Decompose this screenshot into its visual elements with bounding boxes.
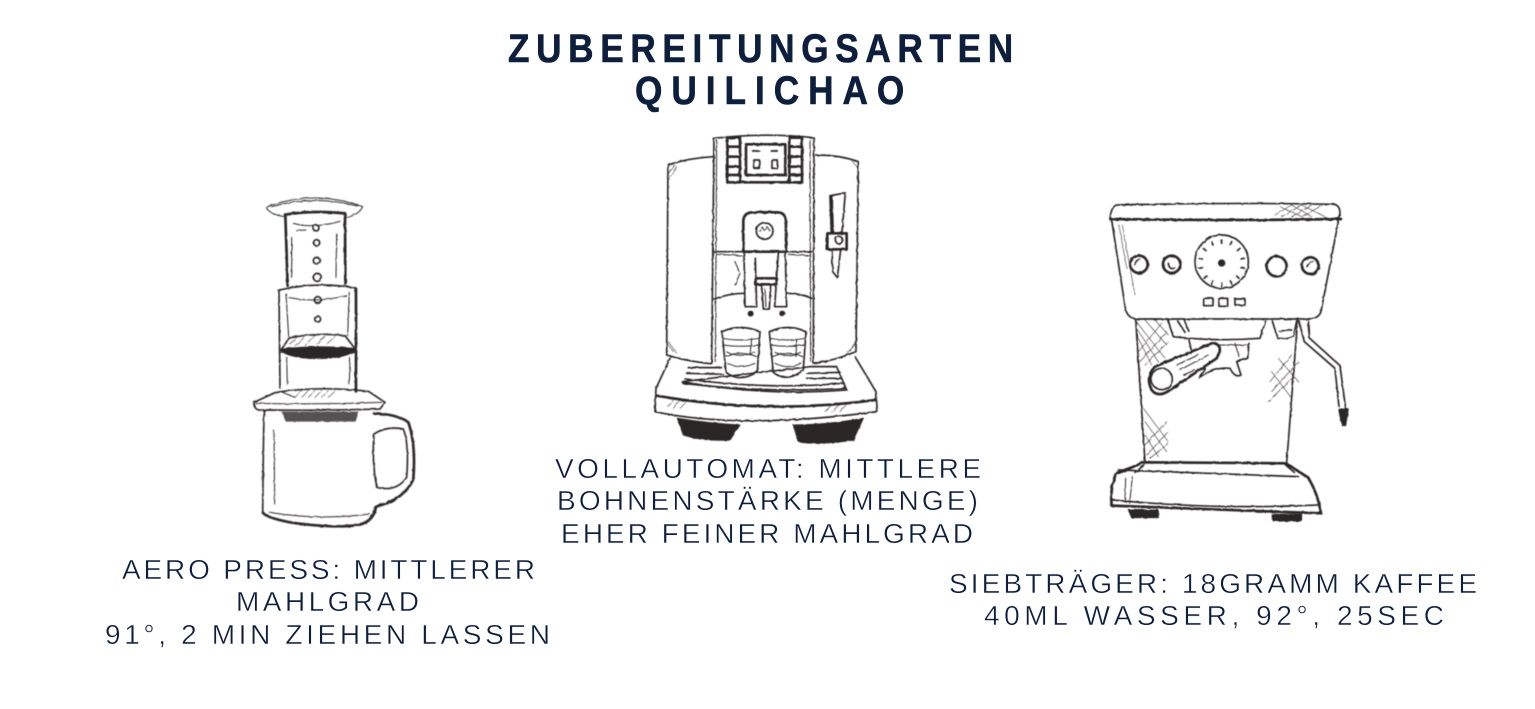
- dial: [1195, 235, 1248, 288]
- icon: fully automatic coffee machine: [655, 135, 877, 443]
- steam wand: [827, 193, 847, 278]
- text block: aero press: [105, 554, 550, 650]
- text block: vollautomat: VOLLAUTOMAT: MITTLERE: [555, 453, 981, 484]
- knobs: [1130, 256, 1319, 276]
- title: QUILICHAO: [635, 68, 904, 112]
- text block: aero press: AERO PRESS: MITTLERER: [122, 554, 535, 585]
- icon: aero press on mug: [254, 198, 414, 526]
- machine feet: [677, 418, 863, 443]
- display panel: [727, 138, 802, 182]
- text block: siebträger: 40ML WASSER, 92°, 25SEC: [984, 600, 1444, 631]
- icon: portafilter espresso machine: [1110, 203, 1348, 521]
- title: ZUBEREITUNGSARTEN: [508, 26, 1013, 70]
- coffee spout: [743, 212, 787, 316]
- text block: vollautomat: EHER FEINER MAHLGRAD: [561, 518, 973, 549]
- text block: siebträger: SIEBTRÄGER: 18GRAMM KAFFEE: [949, 568, 1477, 599]
- base: [1111, 462, 1321, 521]
- text block: aero press: MAHLGRAD: [236, 586, 419, 617]
- text block: vollautomat: [555, 453, 981, 549]
- group head: [1168, 320, 1266, 340]
- portafilter handle: [1149, 343, 1220, 394]
- steam pipe: [1299, 321, 1348, 426]
- text block: vollautomat: BOHNENSTÄRKE (MENGE): [557, 485, 978, 516]
- drip tray: [655, 357, 877, 421]
- buttons: [1204, 298, 1245, 306]
- title: [508, 26, 1013, 112]
- text block: siebträger: [949, 568, 1477, 631]
- cups: [722, 327, 806, 378]
- text block: aero press: 91°, 2 MIN ZIEHEN LASSEN: [105, 619, 550, 650]
